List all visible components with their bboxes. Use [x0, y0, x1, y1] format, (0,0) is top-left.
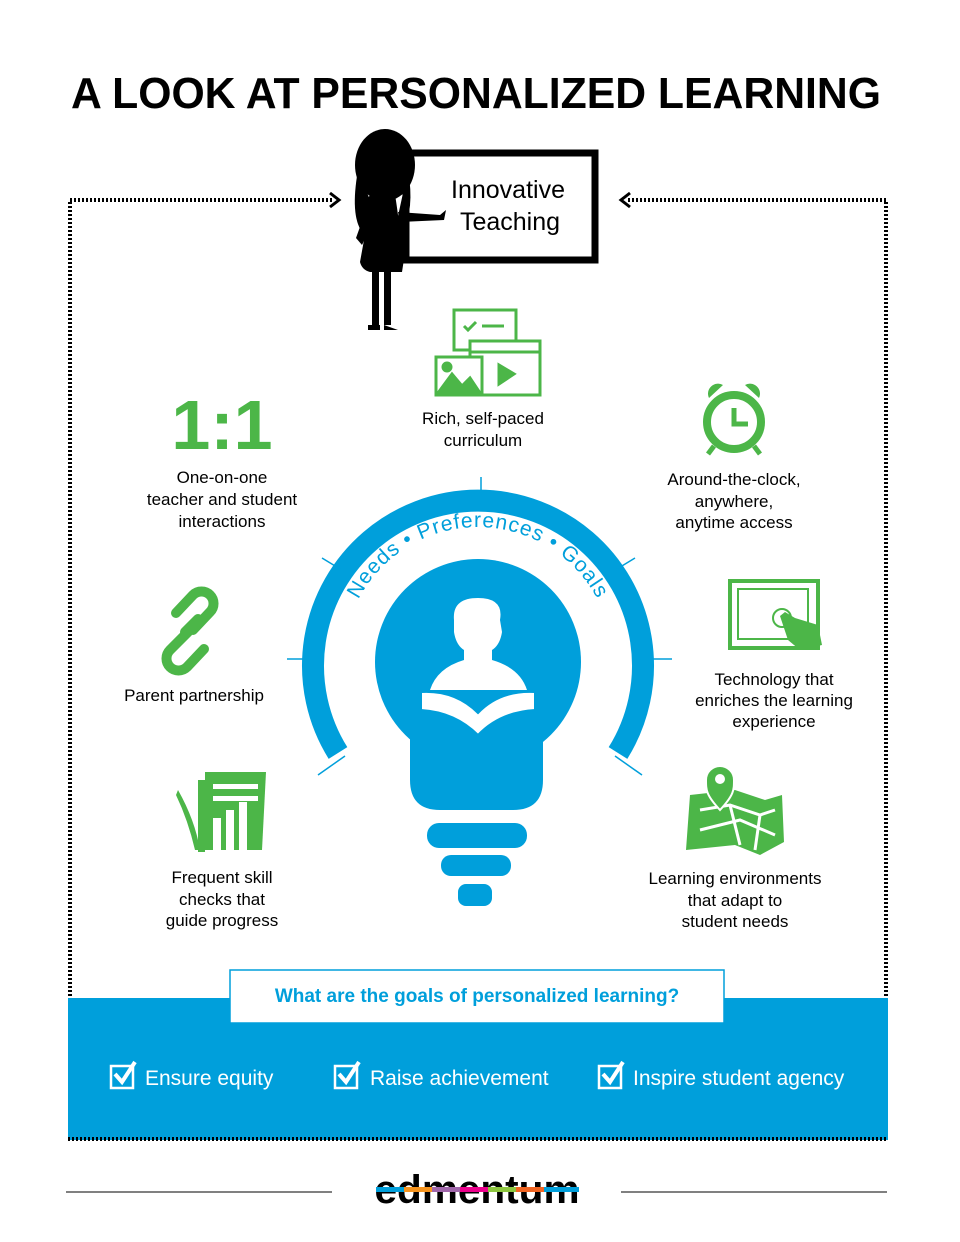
footer lines [66, 1191, 332, 1193]
text: around the clock: anytime access [675, 513, 793, 532]
text: technology: Technology that [714, 670, 834, 689]
icon: student reading [421, 598, 535, 735]
goal: raise achievement: Raise achievement [370, 1067, 549, 1090]
goal: inspire student agency: Inspire student agency [633, 1067, 845, 1090]
title: A LOOK AT PERSONALIZED LEARNING [71, 69, 881, 118]
text: around the clock [667, 470, 801, 532]
arrow: left [330, 193, 339, 207]
text: learning environments: Learning environments [649, 869, 821, 888]
text: one-on-one [147, 468, 297, 531]
text: around the clock: Around-the-clock, [667, 470, 801, 489]
blue goals band [68, 998, 888, 1140]
text: learning environments: that adapt to [688, 891, 782, 910]
text: skill checks: checks that [179, 890, 265, 909]
arrow: right [621, 193, 630, 207]
board: Innovative Teaching: Innovative [451, 176, 565, 204]
logo: edmentum: edmentum [374, 1168, 580, 1212]
text: technology: experience [732, 712, 816, 731]
text: curriculum: Rich, self-paced [422, 409, 544, 428]
icon: 1:1: 1:1 [171, 386, 273, 464]
text: learning environments [649, 869, 821, 931]
text: around the clock: anywhere, [695, 492, 773, 511]
goals question box [230, 970, 724, 1023]
text: skill checks: Frequent skill [171, 868, 273, 887]
text: parent partnership: Parent partnership [124, 686, 264, 705]
icon: skill checks [176, 772, 266, 852]
text: curriculum: curriculum [444, 431, 522, 450]
text: technology: enriches the learning [695, 691, 853, 710]
icon: curriculum [436, 310, 540, 395]
goal: raise achievement [335, 1062, 549, 1090]
text: learning environments: student needs [682, 912, 788, 931]
icon: map [686, 766, 784, 855]
text: curriculum [422, 409, 544, 450]
lightbulb graphic [287, 477, 672, 906]
band bottom dotted [68, 1137, 888, 1141]
text: technology [695, 670, 853, 731]
icon: link [166, 591, 214, 671]
text: skill checks [166, 868, 278, 930]
goal: ensure equity [111, 1062, 274, 1090]
icon: alarm clock [707, 384, 761, 454]
dotted frame [70, 200, 886, 1140]
icon: teacher silhouette [355, 129, 446, 330]
icon: tablet touch [730, 581, 822, 650]
text: one-on-one: One-on-one [177, 468, 267, 487]
board: Innovative Teaching [406, 153, 595, 260]
text: one-on-one: teacher and student [147, 490, 297, 509]
lightbulb graphic: Needs • Preferences • Goals [346, 513, 606, 598]
board: Innovative Teaching: Teaching [460, 208, 560, 236]
goal: ensure equity: Ensure equity [145, 1067, 274, 1090]
text: one-on-one: interactions [179, 512, 265, 531]
text: skill checks: guide progress [166, 911, 278, 930]
goals question box: What are the goals of personalized learning? [275, 986, 679, 1007]
